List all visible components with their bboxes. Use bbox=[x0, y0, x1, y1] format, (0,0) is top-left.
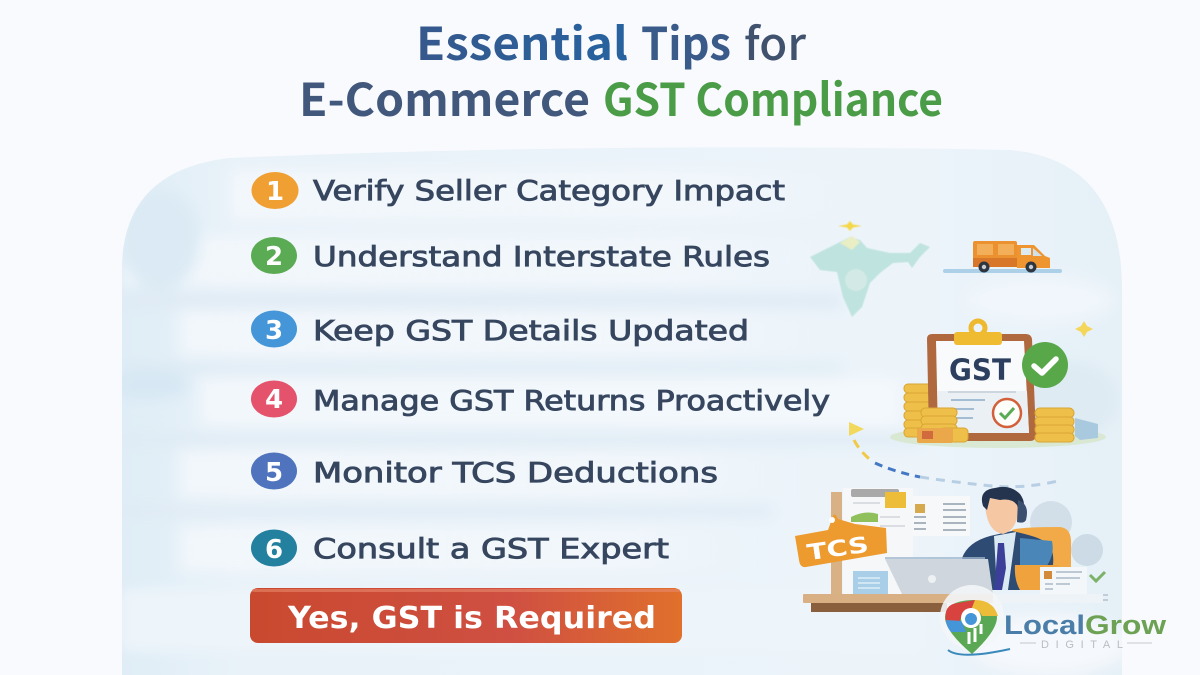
front coins bbox=[921, 408, 968, 442]
background round icons bbox=[1030, 501, 1072, 543]
TCS tag: TCS bbox=[805, 533, 870, 566]
logo wordmark: Local bbox=[1004, 610, 1085, 640]
title line 2: E-Commerce bbox=[299, 64, 590, 129]
blue note bbox=[853, 571, 888, 594]
badge 1 bbox=[252, 172, 298, 209]
parcel bbox=[917, 428, 953, 443]
sparkle bbox=[1075, 321, 1093, 337]
logo wordmark: Grow bbox=[1085, 610, 1167, 640]
badge 4 bbox=[251, 380, 297, 418]
tip 2 bbox=[251, 237, 770, 274]
badge 5: 5 bbox=[265, 458, 283, 488]
badge 2: 2 bbox=[265, 242, 283, 272]
small check seal bbox=[993, 399, 1021, 427]
document sheets bbox=[843, 488, 913, 595]
icon: delivery truck bbox=[945, 241, 1060, 272]
green check badge bbox=[1022, 342, 1068, 388]
title bbox=[299, 8, 943, 129]
badge 3: 3 bbox=[265, 316, 283, 346]
icon: India map bbox=[810, 221, 930, 317]
tip 6 text: Consult a GST Expert bbox=[313, 533, 669, 565]
TCS tag bbox=[795, 514, 887, 567]
panel: tips background bbox=[110, 145, 1130, 675]
head bbox=[985, 495, 1019, 534]
tip 3 text: Keep GST Details Updated bbox=[313, 315, 749, 347]
right coins bbox=[1035, 408, 1074, 442]
tip 6 bbox=[251, 530, 669, 566]
side document bbox=[1040, 567, 1087, 594]
tip 2 text: Understand Interstate Rules bbox=[313, 241, 770, 273]
title line 1: Essential bbox=[416, 8, 628, 73]
logo pin bbox=[940, 585, 1010, 655]
badge 1: 1 bbox=[266, 177, 284, 207]
badge 2 bbox=[251, 237, 297, 274]
tip 5 bbox=[251, 452, 718, 490]
tip 1 text: Verify Seller Category Impact bbox=[313, 175, 785, 207]
left coins bbox=[904, 384, 934, 437]
tip 4 bbox=[251, 380, 830, 418]
logo: LocalGrow Digital bbox=[940, 585, 1167, 655]
clipboard bbox=[927, 334, 1036, 441]
GST label: GST bbox=[949, 353, 1011, 387]
tip 5 text: Monitor TCS Deductions bbox=[313, 457, 718, 489]
clipboard clasp bbox=[954, 321, 1002, 345]
icon: map star bbox=[838, 221, 862, 231]
arrow: dashed route bbox=[849, 422, 1062, 487]
badge 5 bbox=[251, 452, 297, 490]
laptop bbox=[885, 559, 993, 594]
badge 6: 6 bbox=[265, 535, 283, 565]
badge 3 bbox=[251, 310, 297, 348]
orange arm bbox=[1015, 565, 1058, 590]
title line 1: for bbox=[744, 8, 807, 73]
post bbox=[831, 492, 842, 595]
title line 1: Tips bbox=[641, 8, 731, 73]
callout button bbox=[250, 588, 682, 643]
blue box bbox=[1075, 418, 1098, 440]
tip 1 bbox=[252, 172, 785, 209]
tip 4 text: Manage GST Returns Proactively bbox=[313, 385, 830, 417]
title line 2: GST Compliance bbox=[603, 64, 943, 129]
badge 4: 4 bbox=[265, 385, 283, 415]
icon: GST clipboard with coins bbox=[890, 321, 1106, 448]
illustration: consultant at desk bbox=[795, 487, 1108, 612]
desk bbox=[803, 594, 993, 603]
logo subtitle: DIGITAL bbox=[1041, 639, 1123, 651]
tip 3 bbox=[251, 310, 749, 348]
torso bbox=[962, 531, 1053, 595]
callout button: Yes, GST is Required bbox=[287, 601, 656, 636]
chair bbox=[1012, 527, 1071, 586]
badge 6 bbox=[251, 530, 297, 566]
